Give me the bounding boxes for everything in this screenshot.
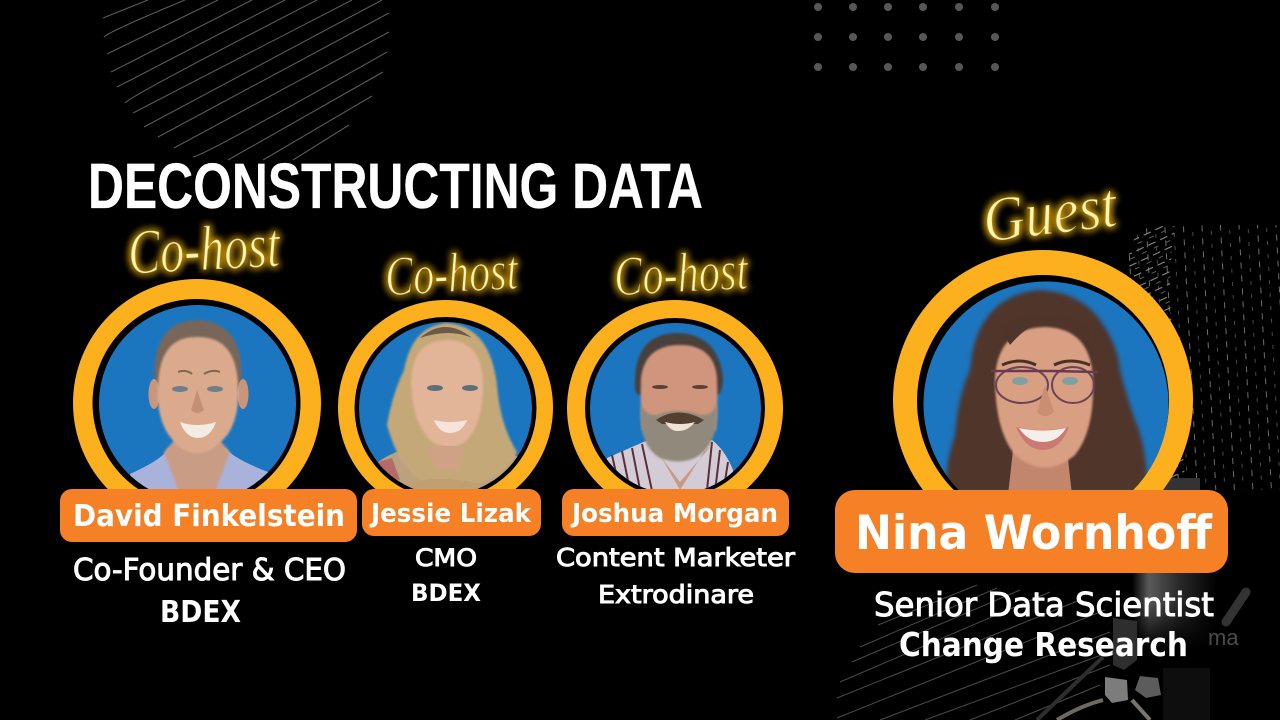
label: co-host 3: Co-host [612, 239, 751, 308]
title: DECONSTRUCTING DATA [88, 150, 703, 222]
role: David Finkelstein: Co-Founder & CEO [73, 553, 346, 588]
role: Nina Wornhoff: Senior Data Scientist [874, 585, 1214, 624]
name: Joshua Morgan [570, 499, 778, 529]
role: Nina Wornhoff [874, 585, 1214, 664]
role: David Finkelstein: BDEX [160, 595, 241, 630]
portrait: David Finkelstein [73, 279, 321, 489]
photo [945, 290, 1147, 495]
name pill: Joshua Morgan [562, 489, 789, 536]
role: Nina Wornhoff: Change Research [899, 625, 1188, 664]
portrait: Jessie Lizak [338, 300, 553, 489]
mic neck [1130, 478, 1200, 492]
role: Joshua Morgan: Content Marketer [556, 543, 796, 572]
mic body [1132, 573, 1217, 648]
mic brand mark: ma [1208, 625, 1239, 650]
label: co-host 2: Co-host [383, 239, 521, 308]
portrait: Nina Wornhoff [893, 250, 1193, 490]
decorative hatch: top left [103, 0, 389, 160]
portrait: Joshua Morgan [567, 300, 783, 489]
role: Jessie Lizak [411, 544, 481, 607]
decorative hatch: bottom right [837, 585, 1115, 720]
microphone [1037, 225, 1280, 720]
role: Joshua Morgan [556, 543, 796, 609]
role: David Finkelstein [73, 553, 346, 630]
label: co-host 1: Co-host [126, 209, 283, 288]
role: Jessie Lizak: CMO [415, 544, 477, 572]
name: Jessie Lizak [369, 499, 532, 529]
mic grille rim [1128, 226, 1185, 480]
name pill: Jessie Lizak [362, 489, 541, 536]
ring [73, 279, 321, 527]
name: David Finkelstein [73, 499, 345, 534]
label: guest: Guest [979, 169, 1122, 256]
decorative dot grid: top right [814, 3, 999, 71]
name pill: David Finkelstein [60, 489, 357, 542]
ring [567, 300, 783, 516]
mic grille [1128, 225, 1280, 490]
photo [130, 318, 268, 489]
name pill: Nina Wornhoff [835, 490, 1228, 573]
photo [607, 333, 733, 500]
mic logo stroke [1226, 592, 1246, 622]
role: Joshua Morgan: Extrodinare [598, 580, 754, 609]
ring [893, 250, 1193, 550]
name: Nina Wornhoff [855, 506, 1213, 561]
photo [378, 323, 520, 500]
role: Jessie Lizak: BDEX [411, 579, 481, 607]
mic mount [1037, 618, 1210, 720]
ring [338, 300, 553, 515]
